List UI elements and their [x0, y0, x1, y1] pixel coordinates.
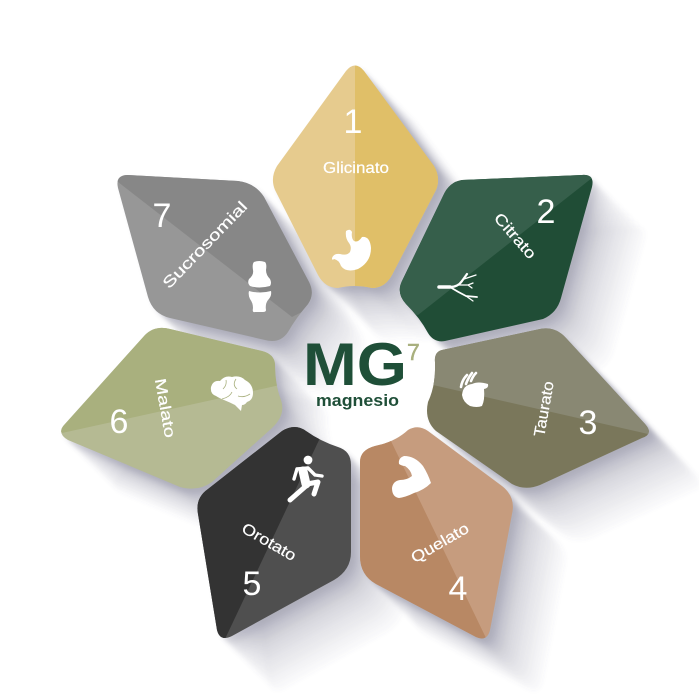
- label: Malato: Malato: [151, 377, 178, 439]
- centre logo: [303, 331, 420, 410]
- number 3: 3: [579, 404, 597, 442]
- icon: flexed arm: [392, 456, 431, 498]
- number 7: 7: [153, 197, 171, 235]
- number 2: 2: [537, 193, 555, 231]
- number 5: 5: [243, 565, 261, 603]
- label: Sucrosomial: Sucrosomial: [160, 198, 251, 292]
- label: Orotato: Orotato: [239, 520, 299, 565]
- logo letters MG: MG: [303, 331, 407, 398]
- panel: 6 Malato: [61, 328, 282, 489]
- panel: 5 Orotato: [197, 427, 351, 638]
- icon: brain: [211, 376, 253, 411]
- number 1: 1: [344, 103, 362, 141]
- label: Glicinato: Glicinato: [323, 160, 389, 177]
- logo superscript 7: 7: [407, 339, 420, 365]
- icon: stomach: [332, 230, 371, 270]
- label: Taurato: Taurato: [531, 380, 558, 438]
- panel: 7 Sucrosomial: [117, 175, 312, 341]
- panel: 4 Quelato: [360, 427, 513, 638]
- panel: 3 Taurato: [427, 328, 649, 488]
- icon: heart: [461, 373, 488, 407]
- icon: runner: [290, 456, 322, 500]
- logo word magnesio: magnesio: [316, 392, 399, 410]
- label: Quelato: Quelato: [408, 520, 472, 567]
- panel: 2 Citrato: [400, 174, 593, 342]
- panel: 1 Glicinato: [272, 66, 438, 288]
- label: Citrato: Citrato: [490, 210, 539, 263]
- icon: branching vessel: [439, 274, 477, 301]
- number 4: 4: [449, 570, 467, 608]
- number 6: 6: [110, 403, 128, 441]
- icon: knee joint: [248, 261, 271, 312]
